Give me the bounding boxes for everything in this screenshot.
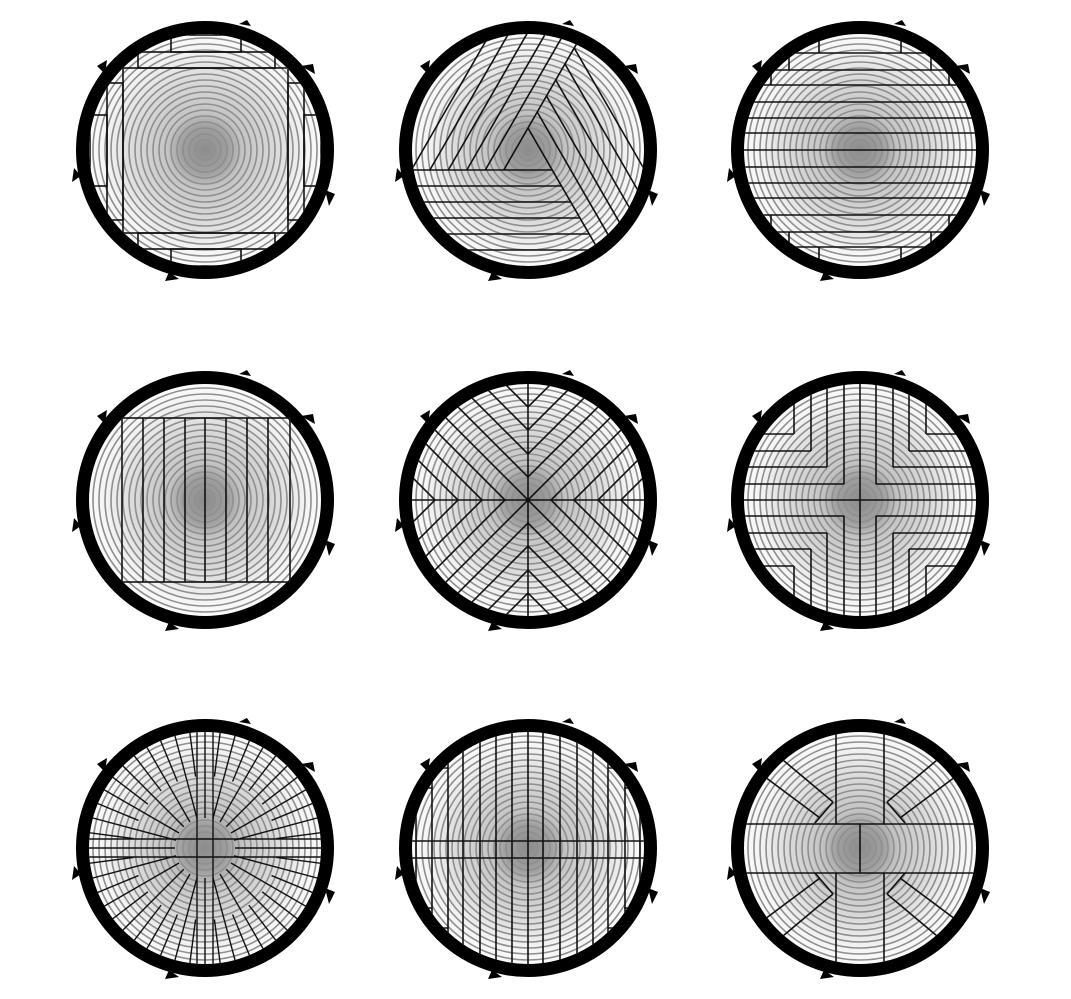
log 3: through-and-through horizontal boards <box>727 20 990 281</box>
log 6: cross pattern cut <box>727 370 990 631</box>
log 4: square cant with vertical boards <box>72 370 335 631</box>
log 9: cross plank with diagonal boards <box>727 718 990 979</box>
log 7: radial sawing <box>72 718 335 979</box>
log 5: chevron quarter-sawn cut <box>395 370 658 631</box>
log 2: triangular pinwheel cut <box>395 20 658 281</box>
log 1: square cant with side boards <box>72 20 335 281</box>
log 8: vertical boards with center plank <box>395 718 658 979</box>
